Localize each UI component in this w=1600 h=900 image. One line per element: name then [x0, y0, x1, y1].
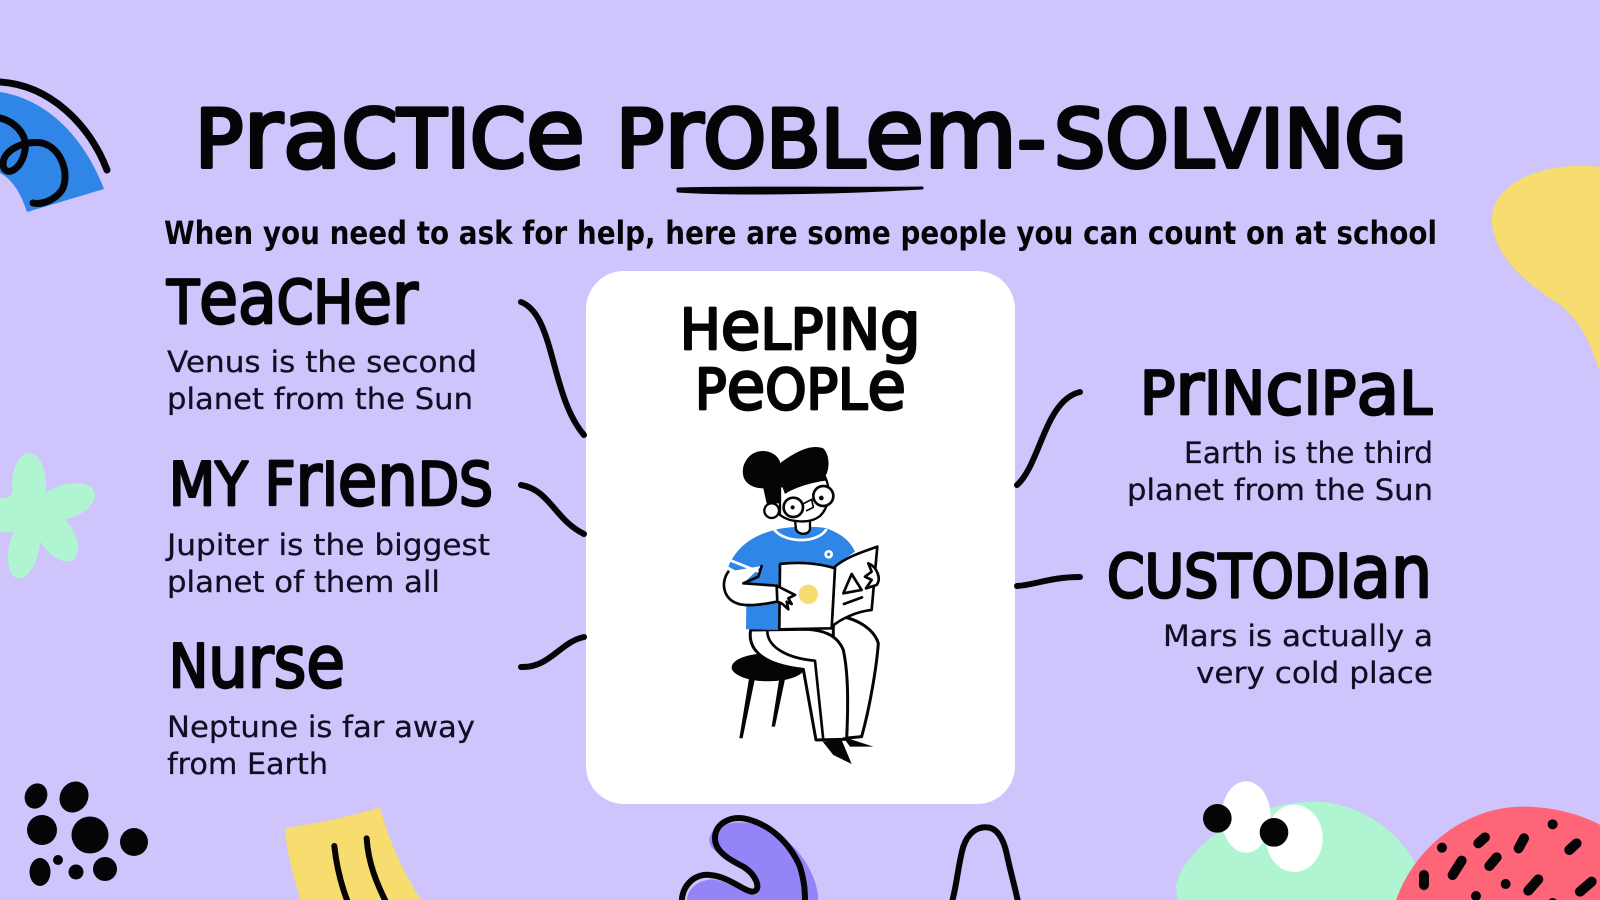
- panel heading: [680, 287, 921, 425]
- title underline: [678, 188, 922, 193]
- item: teacher: [166, 256, 477, 416]
- connector: custodian: [1017, 577, 1080, 586]
- item: custodian: Mars is actually a: [1163, 619, 1433, 653]
- title: PrOBLem-: [616, 78, 1046, 190]
- item: nurse: [167, 620, 475, 781]
- decoration: red spotted blob: [1395, 807, 1600, 900]
- decoration: yellow blob right: [1492, 166, 1600, 372]
- item: nurse: from Earth: [167, 747, 328, 781]
- panel: helping people: [586, 271, 1015, 804]
- item: principal: PrINcIPaL: [1140, 347, 1433, 431]
- item: my friends: planet of them all: [167, 565, 440, 599]
- item: nurse: Neptune is far away: [167, 710, 475, 744]
- item: my friends: [165, 438, 493, 599]
- item: my friends: MY FrIenDS: [169, 438, 493, 522]
- connector: my friends: [521, 485, 584, 534]
- decoration: purple blob outline: [682, 818, 1018, 900]
- connector: teacher: [521, 302, 584, 435]
- item: teacher: TeaCHer: [166, 256, 418, 340]
- item: custodian: very cold place: [1196, 656, 1433, 690]
- item: my friends: Jupiter is the biggest: [165, 528, 490, 562]
- panel heading: HeLPINg: [680, 287, 921, 365]
- decoration: mint flower left: [0, 453, 100, 581]
- item: principal: planet from the Sun: [1127, 473, 1433, 507]
- title: PraCTICe: [195, 78, 585, 190]
- item: custodian: CUSTODIan: [1107, 530, 1432, 614]
- panel heading: PeOPLe: [695, 347, 906, 425]
- subtitle: When you need to ask for help, here are some people you can count on at school: [164, 214, 1437, 252]
- title: [195, 78, 1407, 190]
- decoration: blue rainbow top left: [0, 82, 107, 212]
- item: principal: Earth is the third: [1184, 436, 1433, 470]
- decoration: black dots cluster: [21, 776, 148, 886]
- item: nurse: Nurse: [169, 620, 345, 704]
- connector: principal: [1017, 392, 1080, 485]
- item: principal: [1127, 347, 1433, 507]
- item: teacher: Venus is the second: [167, 345, 477, 379]
- decoration: yellow note: [285, 807, 423, 900]
- illustration: person reading: [724, 447, 879, 764]
- connector: nurse: [521, 637, 584, 667]
- decoration: mint creature with eyes: [1176, 781, 1417, 900]
- title: SOLVING: [1054, 93, 1407, 186]
- item: teacher: planet from the Sun: [167, 382, 473, 416]
- item: custodian: [1107, 530, 1433, 690]
